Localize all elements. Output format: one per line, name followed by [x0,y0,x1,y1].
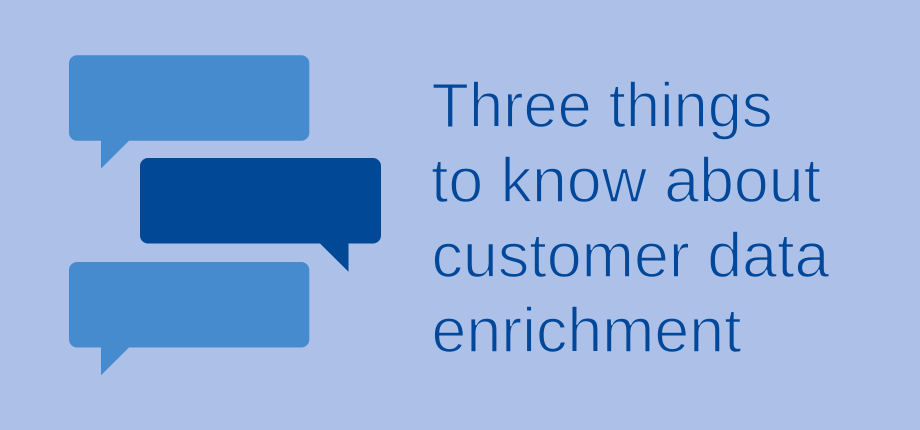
icon: top speech bubble [69,55,309,169]
icon: bottom speech bubble [69,262,309,375]
title: to know about [431,146,821,216]
title [431,71,830,366]
icon: middle speech bubble [140,158,381,272]
icon: speech bubbles [69,55,381,375]
title: enrichment [432,296,742,366]
title: customer data [432,221,830,291]
title: Three things [432,71,772,141]
